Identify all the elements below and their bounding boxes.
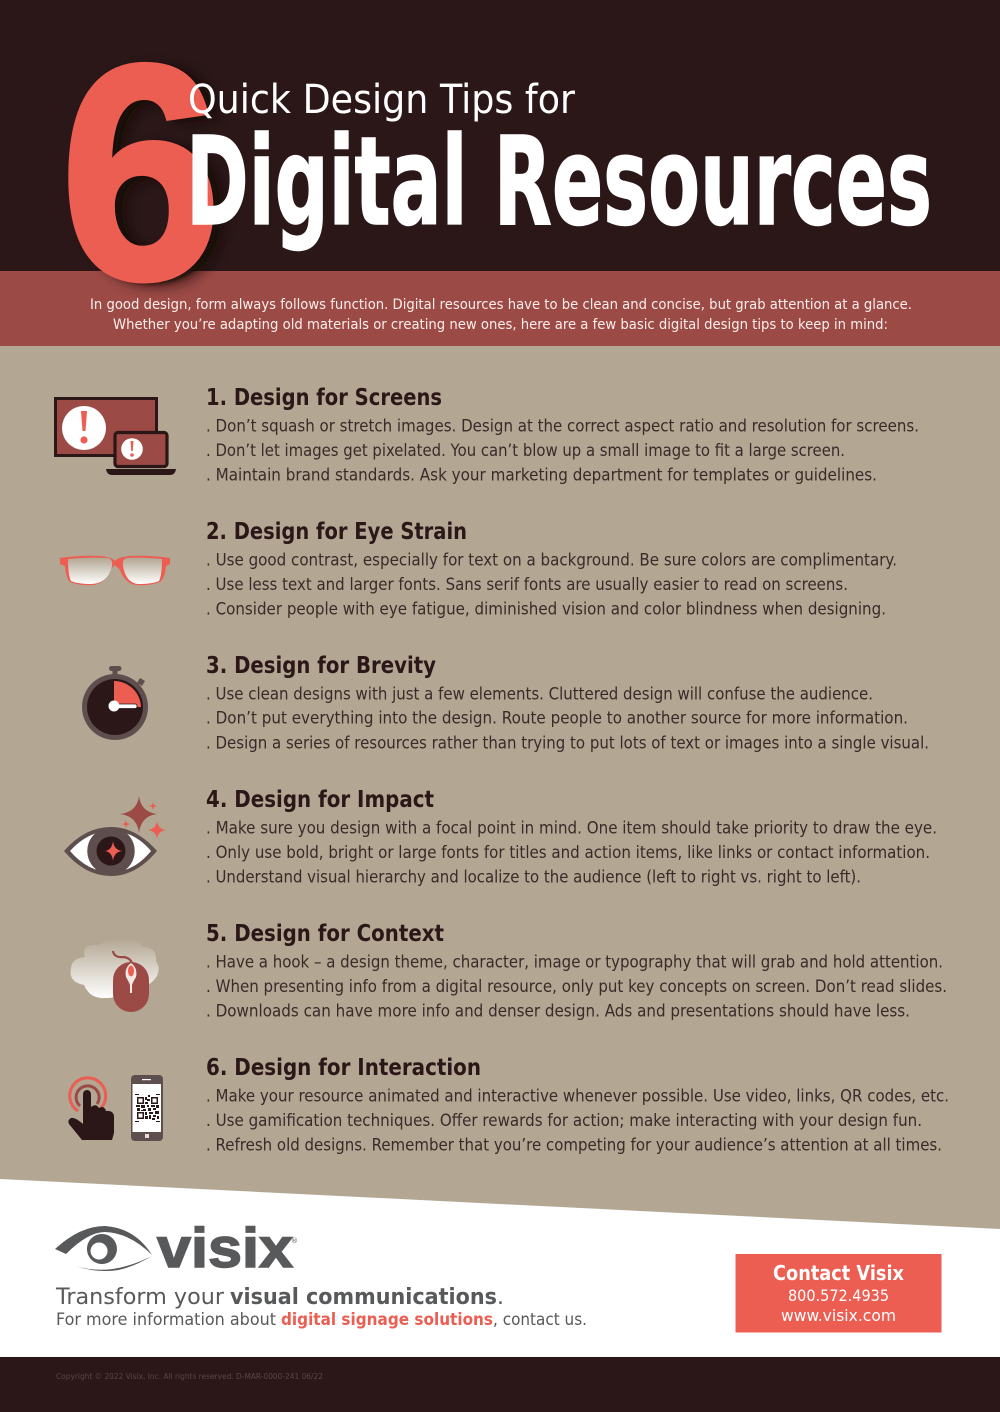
contact heading: Contact Visix <box>773 1261 904 1285</box>
intro text <box>90 297 912 333</box>
tip 5: context <box>71 919 947 1020</box>
icon: monitor and laptop <box>56 398 176 475</box>
bullets: . Only use bold, bright or large fonts for titles and action items, like links or contact information. <box>206 843 930 862</box>
contact line: digital signage solutions <box>281 1310 493 1329</box>
bullets: . Refresh old designs. Remember that you’re competing for your audience’s attention at all times. <box>206 1136 942 1154</box>
bullets: . Don’t squash or stretch images. Design at the correct aspect ratio and resolution for screens. <box>206 416 919 436</box>
heading: 2. Design for Eye Strain <box>206 517 467 545</box>
tagline <box>55 1285 504 1310</box>
bullets <box>206 818 937 886</box>
bullets: . Maintain brand standards. Ask your marketing department for templates or guidelines. <box>206 466 877 484</box>
header band <box>0 0 1000 271</box>
bullets: . Use gamification techniques. Offer rewards for action; make interacting with your design fun. <box>206 1111 922 1130</box>
intro text: In good design, form always follows function. Digital resources have to be clean and concise, but grab attention at a glance. <box>90 297 912 313</box>
icon: phone with QR code <box>131 1075 163 1141</box>
phone number: 800.572.4935 <box>788 1286 889 1305</box>
icon: mouse on cloud <box>71 938 159 1012</box>
footer white panel <box>0 1179 1000 1357</box>
bullets: . Understand visual hierarchy and localize to the audience (left to right vs. right to left). <box>206 868 861 886</box>
contact line <box>56 1310 587 1329</box>
big number 6: 6 <box>60 2 222 344</box>
tip 1: screens <box>56 383 919 484</box>
heading: 5. Design for Context <box>206 919 444 947</box>
big number 6: 6 <box>67 4 229 346</box>
tip 2: eye strain <box>60 517 897 618</box>
icon: stopwatch <box>82 666 148 740</box>
heading: 6. Design for Interaction <box>206 1053 481 1081</box>
logo wordmark: visix <box>157 1216 293 1279</box>
tagline: . <box>497 1285 504 1310</box>
bullets: . Design a series of resources rather than trying to put lots of text or images into a single visual. <box>206 734 929 752</box>
bullets: . Don’t let images get pixelated. You can’t blow up a small image to fit a large screen. <box>206 441 845 460</box>
intro band <box>0 271 1000 346</box>
heading: 4. Design for Impact <box>206 785 434 813</box>
big number 6: 6 <box>72 6 234 348</box>
tagline: visual communications <box>230 1285 497 1310</box>
visix logo <box>55 1216 298 1279</box>
bullets <box>206 416 919 484</box>
bullets: . Don’t put everything into the design. Route people to another source for more information. <box>206 708 908 728</box>
bullets <box>206 684 929 752</box>
bullets: . Have a hook – a design theme, character, image or typography that will grab and hold attention. <box>206 952 943 972</box>
title line one: Quick Design Tips for <box>188 77 576 123</box>
bullets: . Make your resource animated and interactive whenever possible. Use video, links, QR codes, etc. <box>206 1086 949 1106</box>
contact line: , contact us. <box>493 1310 587 1329</box>
bullets: . Use good contrast, especially for text on a background. Be sure colors are complimentary. <box>206 550 897 570</box>
heading: 1. Design for Screens <box>206 383 442 411</box>
bullets: . Consider people with eye fatigue, diminished vision and color blindness when designing. <box>206 600 886 618</box>
icon: eye with sparkles <box>64 796 166 876</box>
bullets: . When presenting info from a digital resource, only put key concepts on screen. Don’t read slides. <box>206 977 947 996</box>
copyright: Copyright © 2022 Visix, Inc. All rights reserved. D-MAR-0000-241 06/22 <box>56 1372 323 1381</box>
tagline: Transform your <box>55 1285 225 1310</box>
QR pattern <box>135 1094 160 1122</box>
website: www.visix.com <box>781 1306 896 1325</box>
contact box <box>736 1254 942 1332</box>
heading: 3. Design for Brevity <box>206 651 436 679</box>
bullets <box>206 952 947 1020</box>
tip 4: impact <box>64 785 937 886</box>
bullets: . Use clean designs with just a few elements. Cluttered design will confuse the audience. <box>206 684 873 704</box>
intro text: Whether you’re adapting old materials or creating new ones, here are a few basic digital design tips to keep in mind: <box>113 317 888 333</box>
bullets: . Use less text and larger fonts. Sans serif fonts are usually easier to read on screens. <box>206 575 848 594</box>
logo eye mark <box>55 1226 152 1271</box>
tip 3: brevity <box>82 651 929 752</box>
bullets <box>206 1086 949 1154</box>
registered mark: ® <box>291 1237 298 1245</box>
bullets: . Downloads can have more info and denser design. Ads and presentations should have less. <box>206 1002 910 1020</box>
bullets <box>206 550 897 618</box>
icon: touch hand <box>68 1078 114 1140</box>
icon: glasses <box>60 556 170 585</box>
contact line: For more information about <box>56 1310 277 1329</box>
tip 6: interaction <box>68 1053 949 1154</box>
bullets: . Make sure you design with a focal point in mind. One item should take priority to draw the eye. <box>206 818 937 838</box>
bottom footer band <box>0 1357 1000 1412</box>
